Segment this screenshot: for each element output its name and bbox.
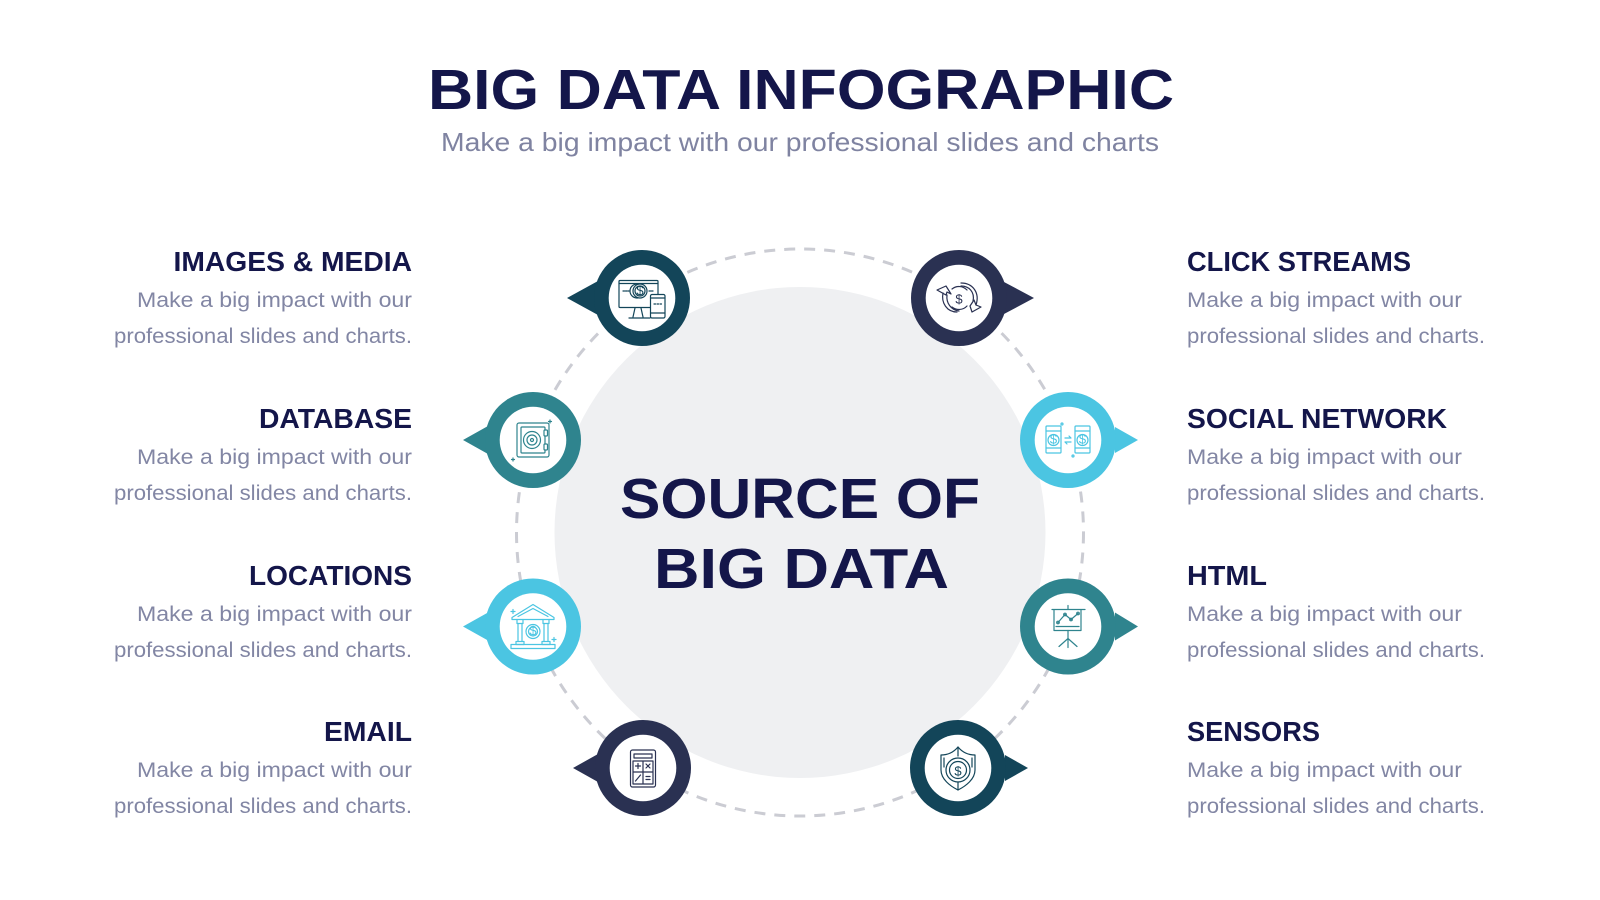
text block: html: HTML — [1187, 560, 1267, 591]
text block: email: Make a big impact with our — [137, 759, 412, 782]
text block: click streams: CLICK STREAMS — [1187, 246, 1411, 277]
text block: social network: professional slides and charts. — [1187, 482, 1485, 505]
text block: html — [1187, 560, 1485, 662]
text block: sensors: professional slides and charts. — [1187, 795, 1485, 818]
text block: social network: SOCIAL NETWORK — [1187, 403, 1447, 434]
text block: locations: professional slides and charts. — [114, 639, 412, 662]
text block: database: professional slides and charts. — [114, 482, 412, 505]
marker: sensors, shield icon — [910, 720, 1028, 816]
text block: sensors: SENSORS — [1187, 716, 1320, 747]
marker: social network, two phones icon — [1020, 392, 1138, 488]
text block: email — [114, 716, 412, 818]
marker: social network, two phones icon: $ — [1050, 432, 1058, 446]
marker: images and media, monitor and phone icon — [567, 250, 690, 346]
text block: sensors — [1187, 716, 1485, 818]
marker: html, presentation board icon — [1020, 578, 1138, 674]
marker: images and media, monitor and phone icon: $ — [636, 283, 644, 298]
text block: images and media: Make a big impact with our — [137, 289, 412, 312]
text block: database: Make a big impact with our — [137, 446, 412, 469]
centre label: BIG DATA — [654, 537, 949, 601]
marker: database, safe icon — [463, 392, 581, 488]
text block: images and media: professional slides and charts. — [114, 325, 412, 348]
marker: click streams, circular arrows icon: $ — [955, 292, 963, 306]
text block: images and media — [114, 246, 412, 348]
text block: click streams: Make a big impact with our — [1187, 289, 1462, 312]
text block: database: DATABASE — [259, 403, 412, 434]
marker: click streams, circular arrows icon — [911, 250, 1034, 346]
centre label — [620, 467, 980, 601]
text block: html: professional slides and charts. — [1187, 639, 1485, 662]
text block: images and media: IMAGES & MEDIA — [174, 246, 412, 277]
text block: locations — [114, 560, 412, 662]
text block: html: Make a big impact with our — [1187, 603, 1462, 626]
text block: click streams: professional slides and charts. — [1187, 325, 1485, 348]
text block: email: professional slides and charts. — [114, 795, 412, 818]
marker: social network, two phones icon: $ — [1079, 432, 1087, 446]
centre label: SOURCE OF — [620, 467, 980, 531]
dashed orbit ring — [516, 249, 1084, 816]
marker: locations, bank icon — [463, 578, 581, 674]
marker: email, calculator icon — [573, 720, 691, 816]
text block: database — [114, 403, 412, 505]
text block: social network — [1187, 403, 1485, 505]
centre circle — [554, 287, 1046, 778]
text block: click streams — [1187, 246, 1485, 348]
marker: locations, bank icon: $ — [529, 623, 537, 638]
marker: sensors, shield icon: $ — [954, 764, 962, 778]
subtitle: Make a big impact with our professional slides and charts — [441, 127, 1159, 157]
title: BIG DATA INFOGRAPHIC — [428, 58, 1174, 122]
text block: locations: Make a big impact with our — [137, 603, 412, 626]
text block: email: EMAIL — [324, 716, 412, 747]
text block: social network: Make a big impact with our — [1187, 446, 1462, 469]
text block: locations: LOCATIONS — [249, 560, 412, 591]
text block: sensors: Make a big impact with our — [1187, 759, 1462, 782]
